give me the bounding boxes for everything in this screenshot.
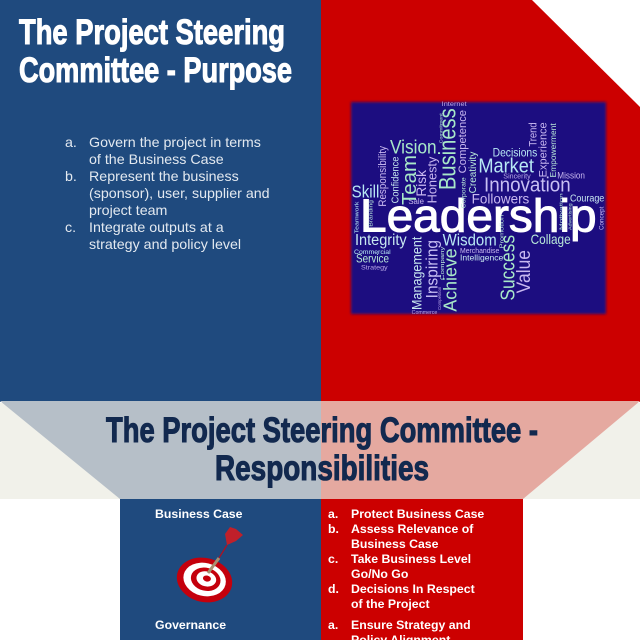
- text block: responsibilities list: d.: [328, 582, 339, 596]
- image: leadership word cloud: Success: [497, 235, 519, 301]
- image: leadership word cloud: Integrity: [355, 232, 407, 249]
- image: leadership word cloud: Competition: [437, 286, 443, 310]
- image: leadership word cloud: Management: [409, 237, 425, 310]
- funnel: left half: [0, 401, 321, 499]
- image: leadership word cloud: Team: [398, 155, 421, 205]
- text block: purpose list: Govern the project in terms: [89, 135, 261, 151]
- image: leadership word cloud: Followers: [472, 190, 529, 206]
- image: leadership word cloud: Skill: [352, 182, 379, 202]
- image: leadership word cloud: Internet: [442, 101, 467, 108]
- image: leadership word cloud: Leadership: [360, 190, 597, 242]
- image: leadership word cloud: Market: [478, 155, 534, 178]
- image: leadership word cloud: Value: [514, 250, 535, 293]
- image: leadership word cloud: Sincerity: [503, 173, 531, 180]
- text block: responsibilities list: of the Project: [351, 597, 430, 611]
- funnel: right half: [321, 401, 640, 499]
- image: leadership word cloud: Collage: [531, 231, 571, 247]
- title: purpose: Committee - Purpose: [19, 51, 292, 90]
- text block: responsibilities list: c.: [328, 552, 338, 566]
- panel: leadership (red): [321, 0, 640, 402]
- image: leadership word cloud: Strategy: [361, 264, 388, 271]
- image: leadership word cloud: Achieve: [440, 248, 461, 312]
- text block: purpose list: Represent the business: [89, 169, 239, 185]
- text block: responsibilities list: Ensure Strategy and: [351, 618, 471, 632]
- text block: purpose list: b.: [65, 169, 77, 185]
- image: leadership word cloud: Commitment: [438, 113, 444, 143]
- image: leadership word cloud: Concept: [598, 206, 605, 230]
- text block: purpose list: (sponsor), user, supplier and: [89, 186, 270, 202]
- text block: responsibilities list: Go/No Go: [351, 567, 409, 581]
- panel: purpose (blue): [0, 0, 321, 402]
- image: leadership word cloud: Wisdom: [443, 231, 497, 250]
- image: leadership word cloud: Commerce: [412, 310, 437, 316]
- image: leadership word cloud: Business: [435, 108, 462, 190]
- text block: responsibilities list: Protect Business Case: [351, 507, 484, 521]
- panel: responsibilities labels (blue): [120, 499, 321, 640]
- background band: eggshell: [0, 403, 640, 499]
- panel: responsibilities list (red): [321, 499, 523, 640]
- image: leadership word cloud: Vision: [390, 137, 437, 158]
- image: leadership word cloud: Confidence: [390, 156, 401, 203]
- image: leadership word cloud: Risk: [413, 169, 429, 197]
- image: leadership word cloud: Teamwork: [354, 201, 360, 233]
- image: leadership word cloud: Mission: [557, 170, 585, 180]
- text block: responsibilities list: b.: [328, 522, 339, 536]
- label: business case: Business Case: [155, 507, 243, 521]
- image: leadership word cloud: Intelligence: [460, 252, 504, 262]
- title: purpose: [19, 13, 292, 90]
- text block: purpose list: c.: [65, 220, 76, 236]
- image: leadership word cloud: Courage: [570, 194, 605, 205]
- image: leadership word cloud: Decisions: [493, 147, 537, 160]
- image: leadership word cloud: Competence: [457, 110, 469, 173]
- text block: responsibilities list: Business Case: [351, 537, 439, 551]
- text block: responsibilities list: a.: [328, 507, 338, 521]
- text block: purpose list: Integrate outputs at a: [89, 220, 224, 236]
- image: leadership word cloud: Trend: [528, 122, 540, 147]
- image: leadership word cloud: Sale: [408, 196, 424, 206]
- image: leadership word cloud: Advertising: [568, 203, 574, 230]
- image: leadership word cloud: Responsibility: [377, 145, 389, 207]
- text block: responsibilities list: [328, 507, 484, 640]
- image: leadership word cloud: Empowerment: [548, 123, 558, 177]
- text block: purpose list: strategy and policy level: [89, 237, 241, 253]
- image: leadership word cloud: Innovation: [484, 174, 571, 197]
- image: leadership word cloud: Inspiring: [422, 240, 441, 298]
- icon: target with dart: [172, 527, 243, 608]
- text block: purpose list: [65, 135, 270, 253]
- image: leadership word cloud: Promotion: [499, 215, 505, 248]
- image: leadership word cloud: Branding: [369, 200, 375, 227]
- text block: purpose list: of the Business Case: [89, 152, 224, 168]
- text block: responsibilities list: Decisions In Respect: [351, 582, 475, 596]
- label: governance: Governance: [155, 618, 226, 632]
- image: leadership word cloud: Motivation: [559, 193, 565, 230]
- text block: purpose list: project team: [89, 203, 167, 219]
- title: purpose: The Project Steering: [19, 13, 285, 52]
- image: leadership word cloud: [351, 101, 606, 316]
- image: leadership word cloud: Corporate: [461, 177, 468, 208]
- image: leadership word cloud: Experience: [538, 122, 550, 177]
- text block: purpose list: a.: [65, 135, 77, 151]
- image: leadership word cloud: Service: [356, 252, 389, 265]
- heading: responsibilities: [106, 411, 538, 488]
- image: leadership word cloud: Merchandise: [460, 248, 499, 255]
- text block: responsibilities list: Assess Relevance of: [351, 522, 474, 536]
- text block: responsibilities list: a.: [328, 618, 338, 632]
- image: leadership word cloud: Commercial: [354, 249, 391, 256]
- text block: responsibilities list: Take Business Level: [351, 552, 471, 566]
- image: leadership word cloud: Company: [440, 246, 446, 280]
- image: leadership word cloud: Honesty: [425, 156, 440, 203]
- heading: responsibilities: Responsibilities: [215, 449, 429, 488]
- image: leadership word cloud: Creativity: [468, 152, 479, 193]
